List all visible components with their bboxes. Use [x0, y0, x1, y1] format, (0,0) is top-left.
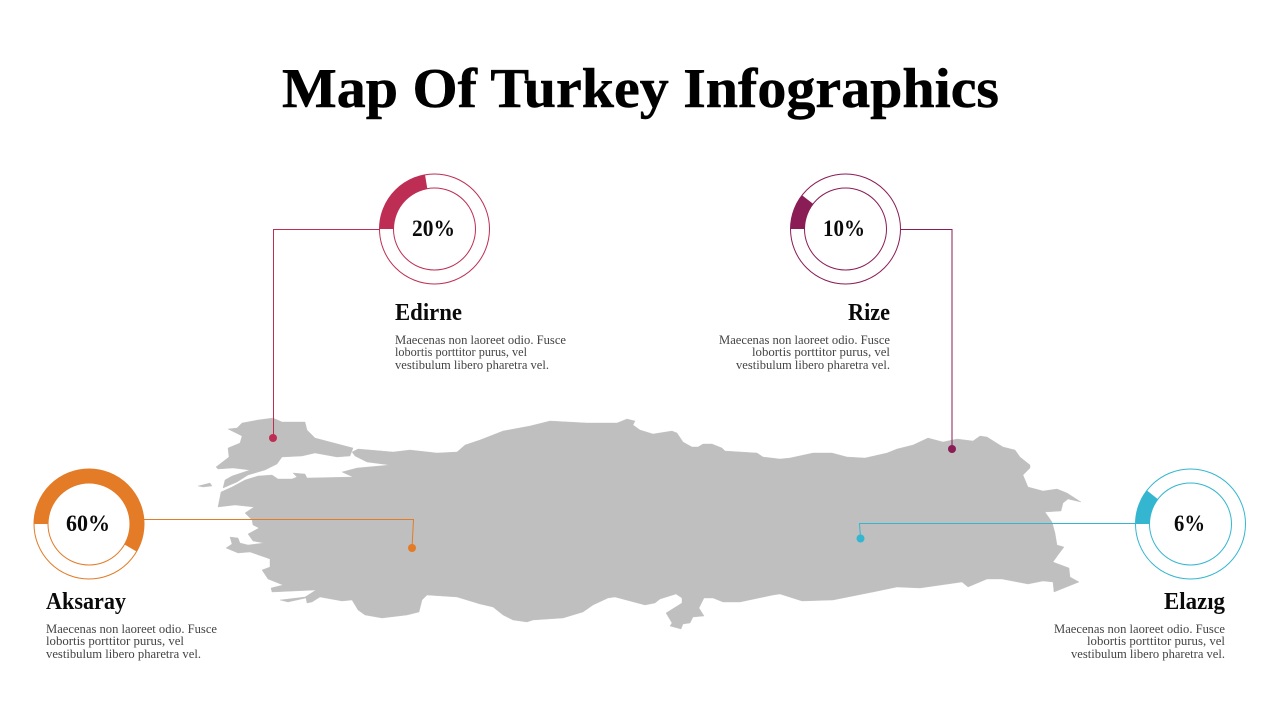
panel: Edirne — [269, 174, 566, 442]
description: Rize: vestibulum libero pharetra vel. — [736, 358, 890, 372]
description: Edirne: vestibulum libero pharetra vel. — [395, 358, 549, 372]
donut: 60%: 60% — [66, 511, 110, 536]
map marker: Aksaray — [408, 544, 416, 552]
map of Turkey — [198, 418, 1081, 629]
description: Aksaray: Maecenas non laoreet odio. Fusce — [46, 622, 217, 636]
description: Aksaray — [46, 622, 217, 661]
description: Rize: lobortis porttitor purus, vel — [752, 345, 891, 359]
panel: Rize — [719, 174, 956, 453]
heading: Rize: Rize — [848, 300, 890, 326]
heading: Elazig: Elazıg — [1164, 589, 1225, 615]
description: Elazig — [1054, 622, 1226, 661]
panel: Elazig — [856, 469, 1246, 661]
map marker: Elazig — [856, 534, 864, 542]
heading: Edirne: Edirne — [395, 300, 462, 326]
heading: Aksaray: Aksaray — [46, 589, 126, 615]
description: Elazig: lobortis porttitor purus, vel — [1087, 634, 1226, 648]
donut: 20% — [380, 174, 490, 284]
donut: 20%: 20% — [412, 216, 455, 241]
connector: Aksaray — [144, 520, 414, 548]
map marker: Rize — [948, 445, 956, 453]
connector: Elazig — [860, 524, 1135, 538]
description: Rize — [719, 333, 891, 372]
donut: 10% — [790, 174, 900, 284]
description: Edirne: Maecenas non laoreet odio. Fusce — [395, 333, 566, 347]
description: Aksaray: vestibulum libero pharetra vel. — [46, 647, 201, 661]
connector: Edirne — [274, 230, 380, 438]
description: Rize: Maecenas non laoreet odio. Fusce — [719, 333, 890, 347]
description: Edirne: lobortis porttitor purus, vel — [395, 345, 528, 359]
description: Elazig: vestibulum libero pharetra vel. — [1071, 647, 1225, 661]
donut: 60% — [34, 469, 144, 579]
donut: 10%: 10% — [823, 216, 865, 241]
description: Aksaray: lobortis porttitor purus, vel — [46, 634, 185, 648]
map marker: Edirne — [269, 434, 277, 442]
donut: 6% — [1135, 469, 1246, 579]
connector: Rize — [901, 230, 952, 449]
donut: 6%: 6% — [1174, 511, 1205, 536]
description: Edirne — [395, 333, 566, 372]
description: Elazig: Maecenas non laoreet odio. Fusce — [1054, 622, 1225, 636]
title: Map Of Turkey Infographics — [282, 58, 999, 120]
panel: Aksaray — [34, 469, 416, 661]
